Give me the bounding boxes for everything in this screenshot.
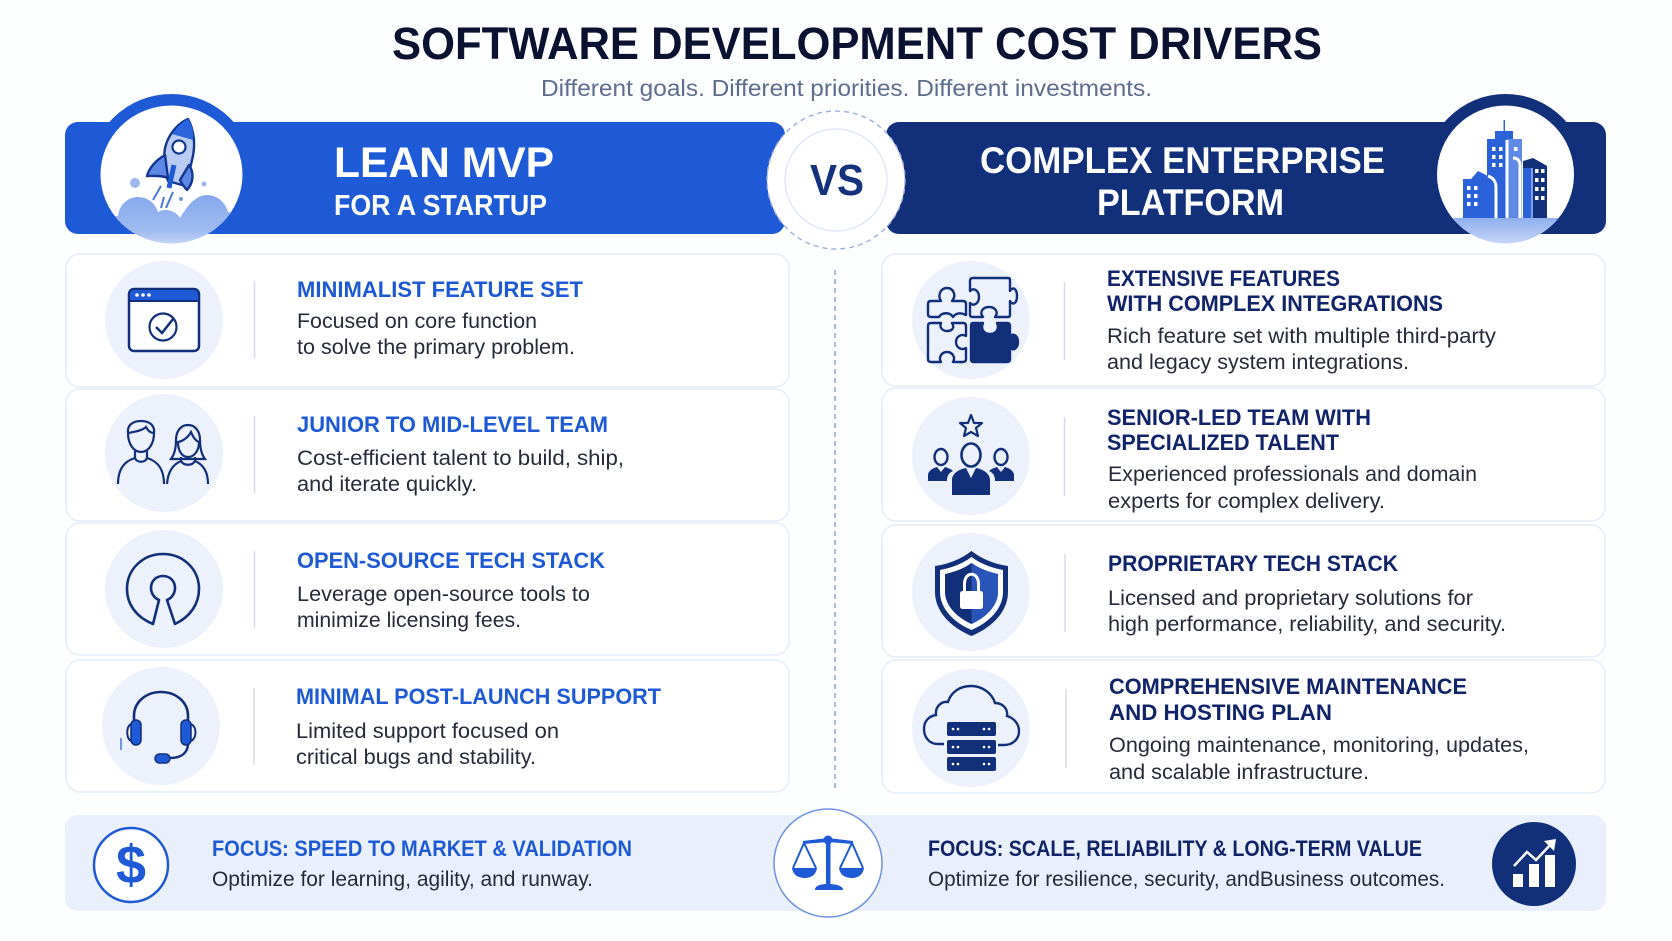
header second line: PLATFORM: [1097, 182, 1284, 223]
icon: team with star: [928, 415, 1014, 495]
description: Focused on core function: [297, 310, 537, 333]
description: [297, 447, 624, 496]
heading: COMPREHENSIVE MAINTENANCE: [1109, 674, 1467, 699]
panel: enterprise header: [886, 94, 1606, 255]
VS badge: VS: [810, 156, 864, 205]
panel: minimal post-launch support: [66, 660, 789, 792]
VS badge: [767, 111, 905, 249]
divider: center dashed line: [834, 270, 836, 792]
panel: open-source tech stack: [66, 523, 789, 655]
icon: two people: [118, 421, 208, 484]
heading: [1109, 674, 1467, 725]
icon: headset: [121, 692, 196, 763]
icon: browser window: [129, 289, 199, 351]
panel: lean MVP header: [65, 94, 785, 255]
header text: LEAN MVP: [334, 139, 554, 187]
heading: OPEN-SOURCE TECH STACK: [297, 548, 605, 573]
description: to solve the primary problem.: [297, 336, 575, 359]
icon: shield with lock: [935, 551, 1008, 636]
icon: cloud server: [924, 686, 1019, 771]
description: Limited support focused on: [296, 720, 559, 743]
description: critical bugs and stability.: [296, 746, 536, 769]
description: Leverage open-source tools to: [297, 583, 590, 606]
description: experts for complex delivery.: [1108, 490, 1385, 513]
icon: open source: [127, 554, 199, 624]
panel: comprehensive maintenance: [882, 660, 1605, 793]
heading: [1107, 266, 1443, 316]
icon: growth chart: [1492, 822, 1576, 906]
heading: SENIOR-LED TEAM WITH: [1107, 405, 1371, 430]
focus heading: left: FOCUS: SPEED TO MARKET & VALIDATION: [212, 836, 632, 861]
title: SOFTWARE DEVELOPMENT COST DRIVERS: [392, 18, 1322, 69]
panel: proprietary tech stack: [882, 525, 1605, 657]
description: Experienced professionals and domain: [1108, 463, 1477, 486]
icon: dollar: [94, 828, 168, 902]
heading: MINIMALIST FEATURE SET: [297, 277, 584, 302]
subtitle: Different goals. Different priorities. Different investments.: [541, 75, 1152, 101]
description: [1109, 734, 1529, 784]
description: [1108, 463, 1477, 513]
icon: balance scale: [774, 809, 882, 917]
description: Cost-efficient talent to build, ship,: [297, 447, 624, 470]
description: and scalable infrastructure.: [1109, 761, 1369, 784]
panel: extensive features: [882, 254, 1605, 386]
description: [297, 310, 575, 359]
icon: puzzle pieces: [928, 278, 1018, 362]
description: [1107, 325, 1497, 374]
description: Rich feature set with multiple third-party: [1107, 325, 1497, 348]
heading: WITH COMPLEX INTEGRATIONS: [1107, 291, 1443, 316]
header subtext: FOR A STARTUP: [334, 190, 547, 222]
description: minimize licensing fees.: [297, 609, 521, 632]
description: Ongoing maintenance, monitoring, updates,: [1109, 734, 1529, 757]
header text: COMPLEX ENTERPRISE: [980, 140, 1385, 181]
description: and legacy system integrations.: [1107, 351, 1409, 374]
icon: dollar: $: [116, 835, 146, 895]
focus heading: right: FOCUS: SCALE, RELIABILITY & LONG-TERM VALUE: [928, 836, 1422, 861]
focus text: left: Optimize for learning, agility, and runway.: [212, 868, 593, 891]
description: [1108, 587, 1506, 636]
heading: MINIMAL POST-LAUNCH SUPPORT: [296, 684, 662, 709]
focus text: right: Optimize for resilience, security, andBusiness outcomes.: [928, 868, 1445, 891]
heading: JUNIOR TO MID-LEVEL TEAM: [297, 412, 608, 437]
heading: AND HOSTING PLAN: [1109, 700, 1332, 725]
heading: PROPRIETARY TECH STACK: [1108, 551, 1398, 576]
heading: EXTENSIVE FEATURES: [1107, 266, 1340, 291]
panel: junior to mid-level team: [66, 389, 789, 521]
icon: city buildings: [1437, 106, 1574, 244]
description: and iterate quickly.: [297, 473, 477, 496]
icon: rocket: [95, 106, 245, 250]
heading: [1107, 405, 1371, 455]
panel: focus band: [65, 815, 1606, 911]
panel: minimalist feature set: [66, 254, 789, 387]
heading: SPECIALIZED TALENT: [1107, 430, 1340, 455]
description: Licensed and proprietary solutions for: [1108, 587, 1473, 610]
description: [296, 720, 559, 769]
panel: senior-led team: [882, 388, 1605, 521]
description: [297, 583, 590, 632]
description: high performance, reliability, and security.: [1108, 613, 1506, 636]
